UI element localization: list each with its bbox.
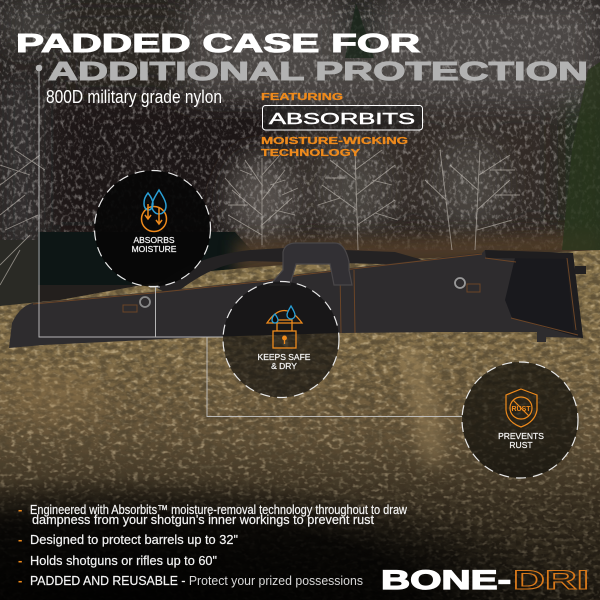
callout: absorbs moisture	[94, 170, 210, 286]
bullet 2: Designed to protect barrels up to 32"	[30, 532, 238, 547]
absorbits badge	[262, 106, 422, 130]
icon: rust shield: RUST	[511, 406, 531, 413]
bullet 1: -	[18, 502, 22, 517]
callout label: RUST	[509, 440, 533, 450]
callout label: ABSORBS	[133, 235, 175, 245]
icon: water drops over soil	[142, 190, 166, 232]
orange stitching	[33, 254, 482, 333]
bullet 1: Engineered with Absorbits™ moisture-removal technology throughout to draw	[30, 502, 408, 517]
brand logo: DRI	[513, 565, 589, 595]
bullet 1	[18, 502, 408, 527]
bare trees	[0, 150, 520, 285]
title line 2: ADDITIONAL PROTECTION	[48, 56, 588, 86]
callout label: PREVENTS	[498, 431, 544, 441]
bullet 1: dampness from your shotgun's inner workings to prevent rust	[32, 512, 374, 527]
callout: keeps safe and dry	[223, 282, 339, 398]
leather patches	[123, 284, 480, 312]
callout label: KEEPS SAFE	[258, 352, 311, 362]
moisture-wicking label	[261, 136, 408, 159]
brand logo	[381, 565, 589, 595]
title line 1: PADDED CASE FOR	[16, 28, 420, 58]
feature bullet list	[18, 502, 408, 588]
bullet 4: -	[18, 573, 22, 588]
bullet 3: -	[18, 553, 22, 568]
callout connector lines	[36, 65, 462, 416]
callout label	[258, 352, 311, 371]
brand logo: BONE-	[381, 565, 511, 595]
moisture-wicking label: MOISTURE-WICKING	[261, 136, 408, 147]
title	[16, 28, 588, 86]
callout label	[498, 431, 544, 450]
moisture-wicking label: TECHNOLOGY	[261, 148, 360, 159]
bullet 2: -	[18, 532, 22, 547]
absorbits badge: ABSORBITS	[269, 111, 415, 128]
pond	[38, 232, 262, 285]
meadow	[0, 250, 600, 600]
bullet 3: Holds shotguns or rifles up to 60"	[30, 553, 217, 568]
callout label: & DRY	[271, 361, 297, 371]
callout: prevents rust	[462, 362, 578, 478]
gun case	[9, 243, 586, 348]
callout label: MOISTURE	[132, 244, 177, 254]
icon: open box with lock and drops	[267, 306, 302, 348]
case body	[9, 250, 583, 348]
far bank	[235, 232, 600, 275]
shoulder strap	[155, 248, 452, 296]
inner lining of open end	[505, 258, 578, 337]
callout label	[132, 235, 177, 254]
buckle rings	[140, 297, 150, 307]
bullet 4: PADDED AND REUSABLE - Protect your prized possessions	[30, 573, 363, 588]
carry handle	[270, 243, 352, 285]
subtitle: 800D military grade nylon	[46, 87, 222, 107]
strap tab	[575, 266, 586, 274]
featuring label: FEATURING	[261, 92, 343, 103]
